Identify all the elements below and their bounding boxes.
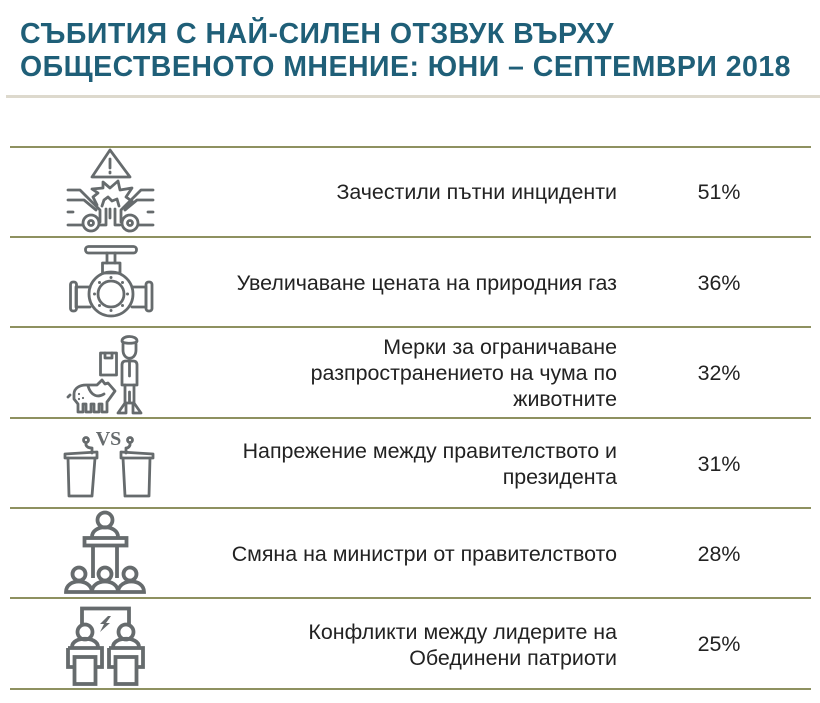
row 2 value: 36% <box>698 271 740 295</box>
row 4 value: 31% <box>698 452 740 476</box>
row 5 value: 28% <box>698 542 740 566</box>
title: СЪБИТИЯ С НАЙ-СИЛЕН ОТЗВУК ВЪРХУ <box>20 18 614 50</box>
row 3 label: Мерки за ограничаване <box>383 335 617 359</box>
icon: car crash warning <box>68 150 153 231</box>
row 4 label <box>243 439 618 489</box>
icon: gas valve <box>70 246 152 316</box>
icon: debate podiums: VS <box>96 428 121 450</box>
row 6 label: Конфликти между лидерите на <box>308 620 617 644</box>
icon: leaders in conflict <box>68 608 143 684</box>
row 2 label: Увеличаване цената на природния газ <box>237 271 617 295</box>
row 1 value: 51% <box>698 180 740 204</box>
icon: speaker and audience <box>66 512 144 592</box>
row 3 label: животните <box>513 387 617 411</box>
row 4 label: Напрежение между правителството и <box>243 439 617 463</box>
row 4 label: президента <box>503 465 617 489</box>
icon: debate podiums <box>65 428 153 496</box>
title: ОБЩЕСТВЕНОТО МНЕНИЕ: ЮНИ – СЕПТЕМВРИ 2018 <box>20 50 791 82</box>
row 3 label: разпространението на чума по <box>311 361 617 385</box>
row 1 label: Зачестили пътни инциденти <box>336 180 617 204</box>
row 3 value: 32% <box>698 361 740 385</box>
title <box>20 17 791 82</box>
row 6 label: Обединени патриоти <box>409 646 617 670</box>
icon: inspector and pig <box>68 336 141 413</box>
row 3 label <box>311 335 617 411</box>
row 6 value: 25% <box>698 632 740 656</box>
row 5 label: Смяна на министри от правителството <box>232 542 617 566</box>
row 6 label <box>308 620 618 670</box>
